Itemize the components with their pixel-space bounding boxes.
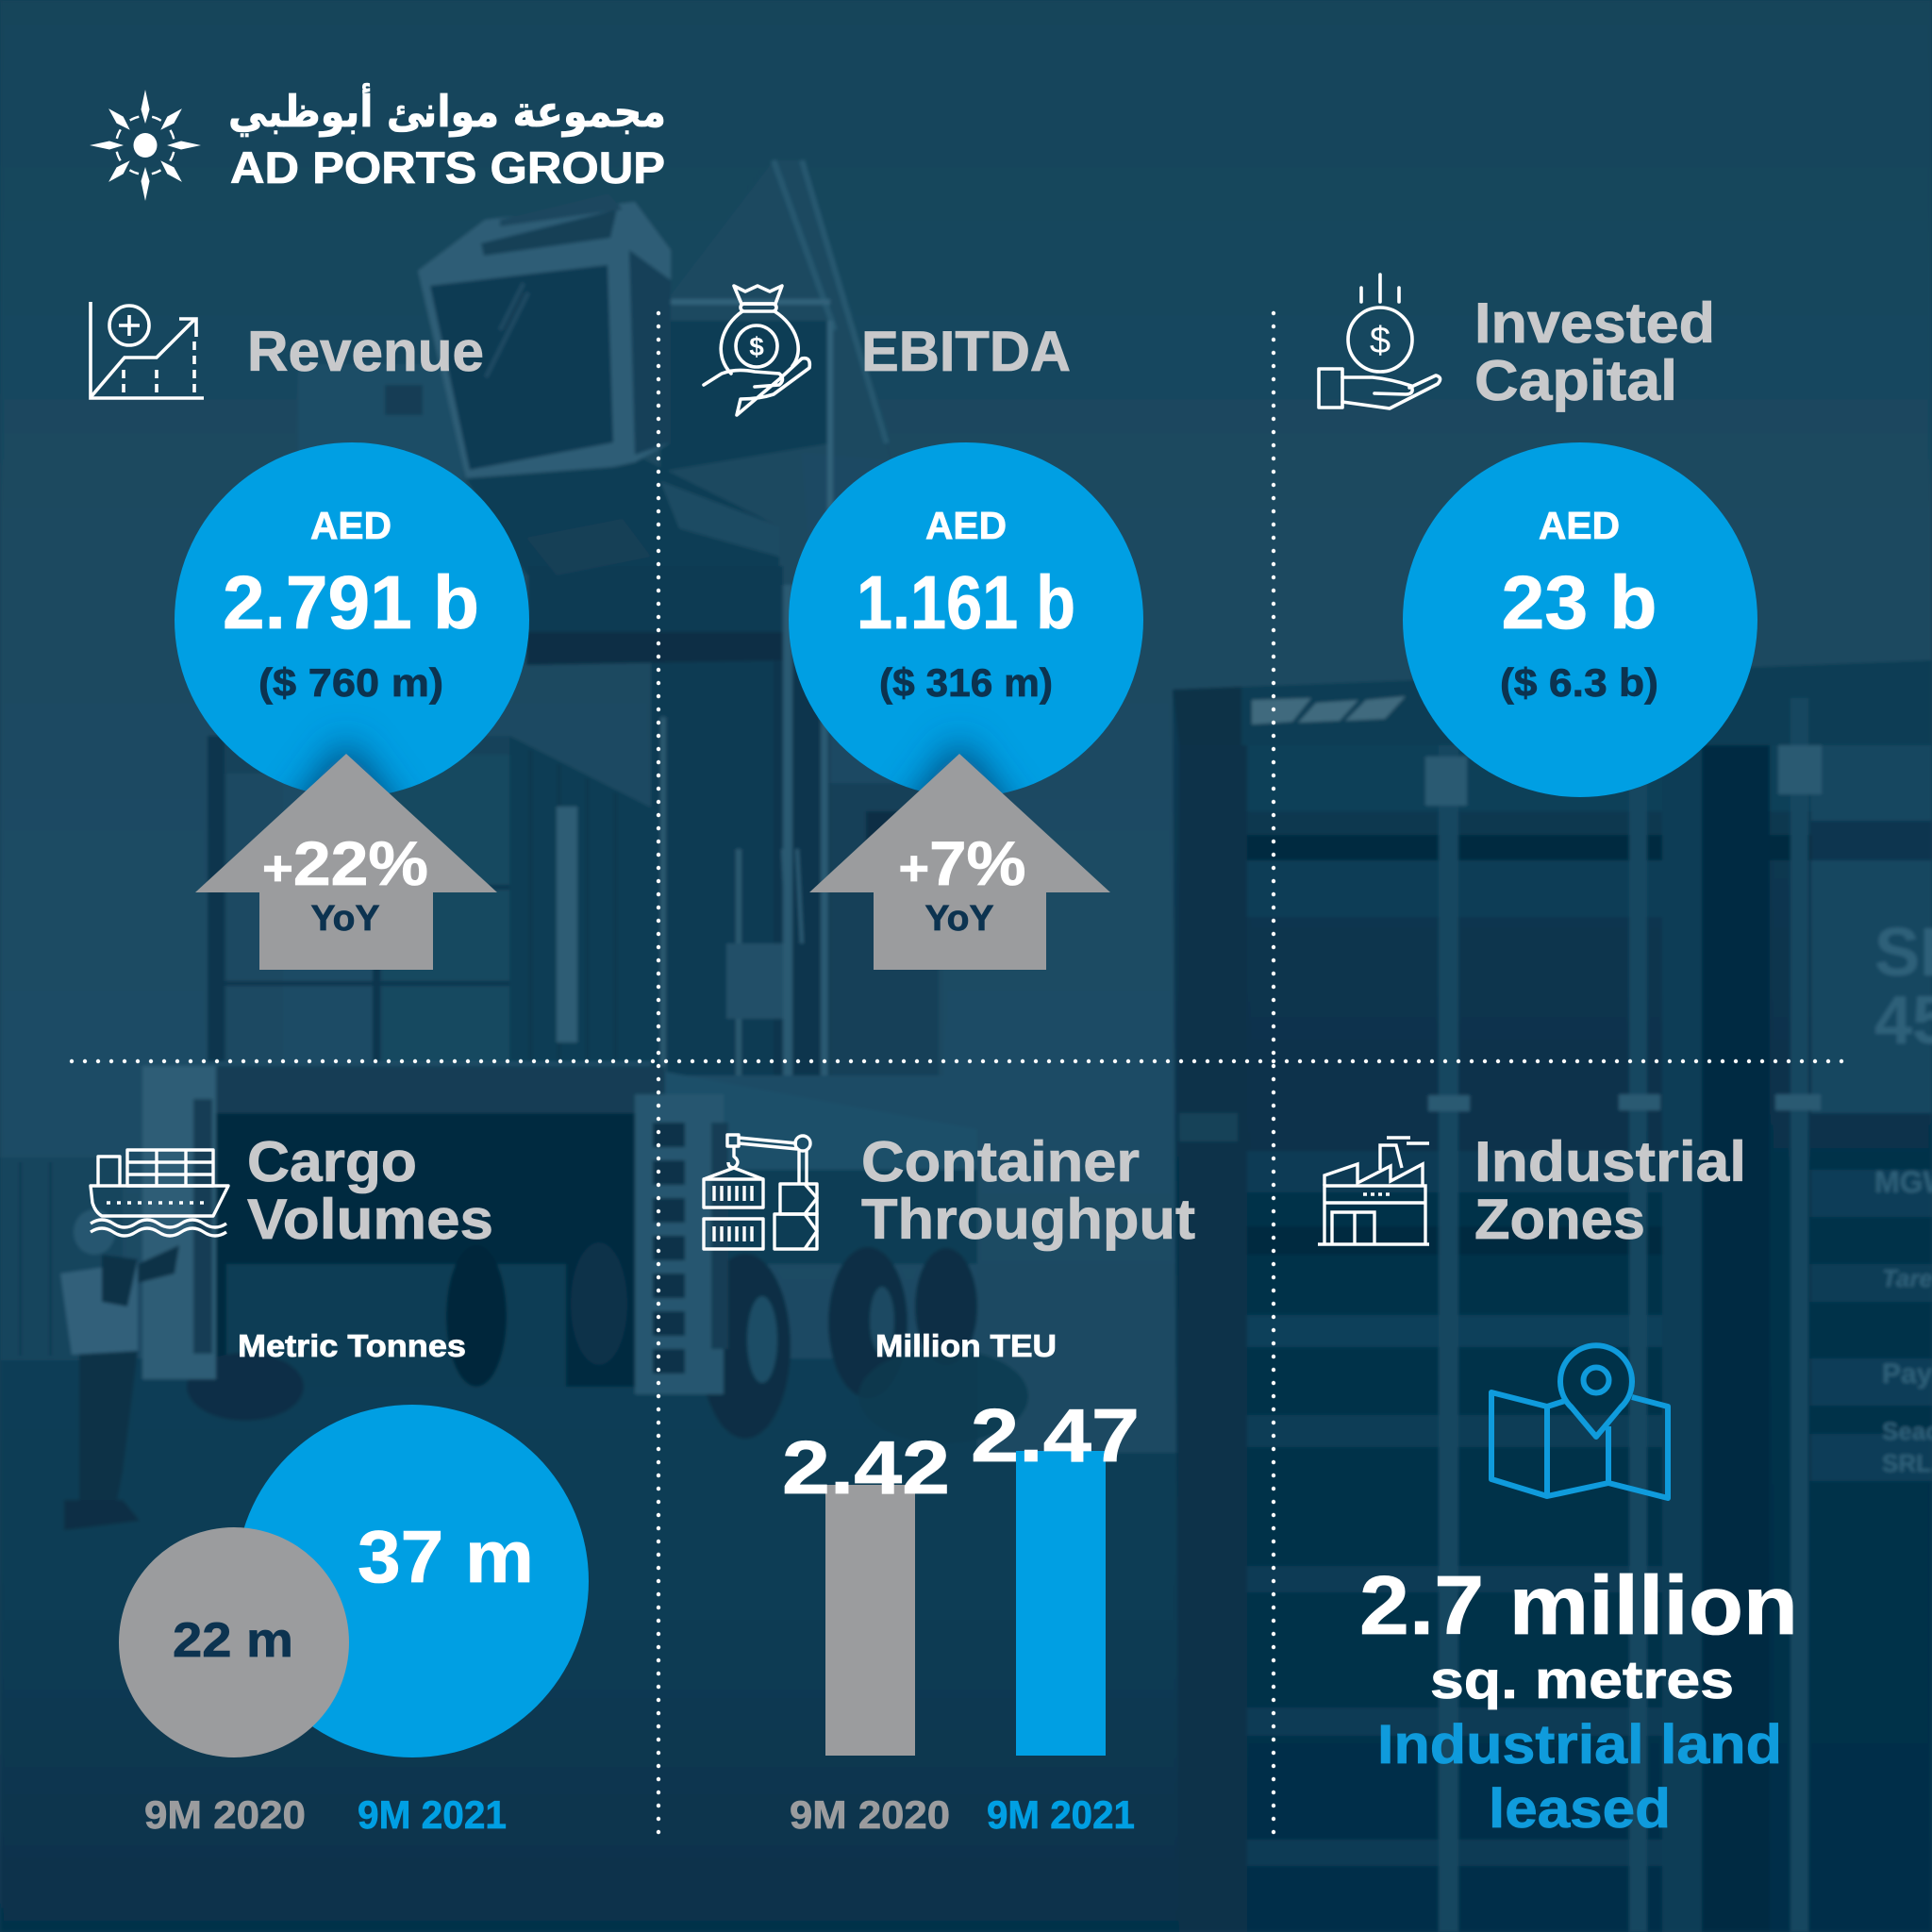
column centre with slots: [635, 1094, 724, 1394]
circle: revenue value: 2.791 b: [223, 560, 479, 644]
icon: map with location pin: [1491, 1345, 1668, 1498]
logo English name: AD PORTS GROUP: [230, 142, 665, 192]
heading: Invested Capital: Capital: [1474, 349, 1677, 412]
circle: revenue value: [175, 442, 529, 793]
icon: money bag in hand: [704, 286, 809, 415]
arrow: +22% YoY: +22%: [262, 828, 428, 898]
arrow: +22% YoY: YoY: [311, 899, 379, 939]
circle: invested capital value: AED: [1539, 504, 1620, 547]
circle: invested capital value: ($ 6.3 b): [1500, 660, 1658, 705]
panel: revenue: [91, 302, 529, 970]
panel: container throughput: [704, 1130, 1195, 1837]
heading: Container Throughput: Throughput: [861, 1188, 1195, 1251]
heading: Industrial Zones: [1474, 1130, 1746, 1251]
icon: money bag in hand: $: [749, 332, 764, 361]
building behind cab: [298, 364, 463, 591]
crane right wedge and lattice: [651, 160, 943, 1075]
caption: Industrial land leased: [1377, 1714, 1782, 1840]
large container right: [1173, 660, 1932, 1932]
label: 9M 2020: 9M 2020: [790, 1792, 950, 1837]
circle: revenue value: ($ 760 m): [258, 660, 443, 705]
panel: industrial zones: [1318, 1130, 1798, 1840]
icon: container crane: [704, 1135, 817, 1249]
icon: sun compass emblem: [90, 90, 201, 201]
stat: 2.7 million: 2.7 million: [1359, 1558, 1798, 1652]
arrow: +7% YoY: [809, 754, 1110, 970]
logo Arabic name: مجموعة موانئ أبوظبي: [228, 83, 666, 138]
column left: [142, 1066, 216, 1379]
heading: EBITDA: EBITDA: [861, 320, 1071, 383]
bar: 9M 2021 throughput: 2.47: [971, 1393, 1140, 1477]
bar: 9M 2020 throughput: 2.42: [782, 1425, 950, 1509]
panel: EBITDA: [704, 286, 1143, 970]
icon: factory: [1318, 1138, 1429, 1244]
heading: Cargo Volumes: [247, 1130, 493, 1251]
label: 9M 2021: 9M 2021: [358, 1792, 507, 1837]
heading: Industrial Zones: Zones: [1474, 1188, 1645, 1251]
stat unit: sq. metres: sq. metres: [1430, 1650, 1734, 1710]
panel: invested capital: [1319, 275, 1757, 797]
heading: Cargo Volumes: Volumes: [247, 1188, 493, 1251]
far stacks left: [0, 1158, 123, 1360]
heading: Industrial Zones: Industrial: [1474, 1130, 1746, 1193]
bar: 9M 2020 throughput: [782, 1425, 950, 1756]
unit label: Million TEU: Million TEU: [875, 1328, 1057, 1363]
heading: Invested Capital: [1474, 291, 1715, 412]
circle: EBITDA value: ($ 316 m): [879, 660, 1053, 705]
label: 9M 2020: 9M 2020: [144, 1792, 306, 1837]
carriage beam and shadow: [142, 1066, 665, 1118]
containers under cab: [208, 736, 509, 1061]
label: 9M 2021: 9M 2021: [987, 1792, 1135, 1837]
heading: Cargo Volumes: Cargo: [247, 1130, 417, 1193]
heading: Invested Capital: Invested: [1474, 291, 1715, 355]
horizon right of crane: [977, 1264, 1185, 1453]
icon: coin above hand: [1319, 275, 1441, 408]
circle: EBITDA value: AED: [925, 504, 1007, 547]
dotted dividers: [72, 313, 1843, 1833]
circle: 9M 2021 cargo 37 m: 37 m: [358, 1515, 534, 1598]
platform below cab: [466, 455, 779, 604]
unit label: Metric Tonnes: Metric Tonnes: [238, 1328, 466, 1363]
worker: [79, 1351, 138, 1500]
caption: Industrial land leased: leased: [1489, 1778, 1671, 1840]
circle: EBITDA value: 1.161 b: [857, 560, 1075, 644]
arrow: +22% YoY: [195, 754, 497, 970]
icon: rising chart with plus: [91, 302, 204, 398]
circle: invested capital value: [1403, 442, 1757, 797]
icon: coin above hand: $: [1370, 320, 1391, 361]
heading: Revenue: Revenue: [247, 320, 484, 383]
wheels: [446, 1245, 507, 1387]
logo: AD Ports Group: [90, 83, 666, 201]
panel: cargo volumes: [91, 1130, 589, 1837]
icon: container ship: [91, 1150, 228, 1236]
circle: EBITDA value: [789, 442, 1143, 793]
dark strut: [526, 632, 783, 665]
arrow: +7% YoY: YoY: [924, 899, 994, 939]
background photo: port crane and container in blue duotone: Tare: [1882, 1264, 1932, 1292]
crane cab: [418, 202, 671, 478]
arrow: +7% YoY: +7%: [898, 828, 1026, 898]
circle: invested capital value: 23 b: [1502, 560, 1657, 644]
circle: 9M 2020 cargo 22 m: [119, 1527, 349, 1757]
circle: 9M 2021 cargo 37 m: [236, 1405, 589, 1757]
bar: 9M 2021 throughput: [971, 1393, 1140, 1756]
heading: Container Throughput: [861, 1130, 1195, 1251]
circle: revenue value: AED: [310, 504, 391, 547]
heading: Container Throughput: Container: [861, 1130, 1140, 1193]
caption: Industrial land leased: Industrial land: [1377, 1714, 1782, 1775]
circle: 9M 2020 cargo 22 m: 22 m: [173, 1613, 293, 1668]
